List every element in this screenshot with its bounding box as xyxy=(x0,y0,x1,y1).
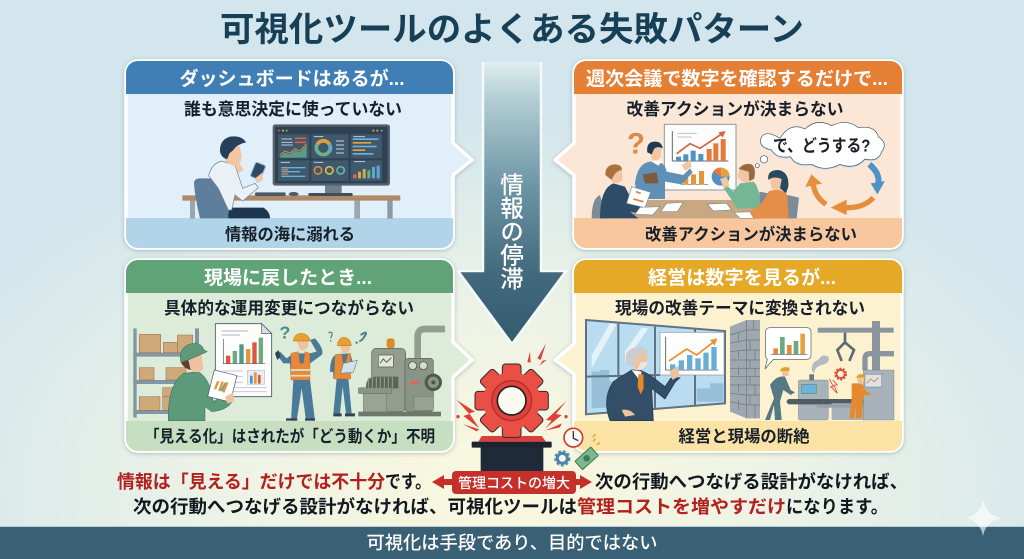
icon: sparkle xyxy=(966,500,1001,536)
line 2 right: になります。 xyxy=(786,496,888,517)
panel footer band xyxy=(574,421,902,451)
line 2 red: 管理コストを増やすだけ xyxy=(577,496,786,517)
subheading: 改善アクションが決まらない xyxy=(626,99,844,119)
footer text: 改善アクションが決まらない xyxy=(645,225,857,244)
cost pill: 管理コストの増大 xyxy=(458,475,570,491)
panel: management xyxy=(555,260,902,451)
panel header xyxy=(574,260,902,293)
question mark: ? xyxy=(279,322,290,342)
question mark: ? xyxy=(627,127,645,160)
arrow: information stagnation xyxy=(458,62,566,344)
header text: 週次会議で数字を確認するだけで... xyxy=(586,68,888,90)
line 2 left: 次の行動へつなげる設計がなければ、可視化ツールは xyxy=(133,496,577,517)
illustration: meeting xyxy=(592,122,885,218)
panel header xyxy=(574,61,902,94)
subheading: 具体的な運用変更につながらない xyxy=(164,298,414,318)
subheading: 誰も意思決定に使っていない xyxy=(184,100,402,119)
subheading: 現場の改善テーマに変換されない xyxy=(615,298,865,318)
footer text: 経営と現場の断絶 xyxy=(678,427,810,446)
icon: broken gear on pedestal xyxy=(456,343,600,477)
header text: 経営は数字を見るが... xyxy=(648,266,836,289)
footer text: 「見える化」はされたが「どう動くか」不明 xyxy=(145,427,435,446)
icon: money xyxy=(575,447,598,470)
line 1 black: です。 xyxy=(385,471,431,492)
panel header xyxy=(126,61,453,94)
illustration: workers, document and machine xyxy=(133,322,445,421)
money sparks xyxy=(593,434,600,445)
bottom banner: 可視化は手段であり、目的ではない xyxy=(366,533,658,553)
bottom message text xyxy=(117,471,908,517)
line 1 red lead: 情報は「見える」だけでは不十分 xyxy=(117,471,386,492)
panel: dashboard xyxy=(126,61,472,248)
panel footer band xyxy=(126,421,453,451)
cloud text: で、どうする? xyxy=(773,136,870,156)
lightning and burst marks xyxy=(456,343,568,431)
header text: ダッシュボードはあるが... xyxy=(180,67,404,90)
illustration: executive, wall and factory xyxy=(586,320,894,421)
icon: blue gear xyxy=(556,452,569,465)
header text: 現場に戻したとき... xyxy=(204,267,372,289)
panel: weekly meeting xyxy=(555,61,902,248)
bottom banner xyxy=(0,526,1024,559)
title: 可視化ツールのよくある失敗パターン xyxy=(220,11,804,49)
footer text: 情報の海に溺れる xyxy=(225,225,355,244)
panel header xyxy=(126,260,453,293)
gear xyxy=(475,364,548,437)
panel: back on site xyxy=(126,260,472,451)
arrow label: 情報の停滞 xyxy=(497,172,524,290)
cost pill xyxy=(452,471,576,494)
panel footer band xyxy=(126,218,453,248)
illustration: person at monitor xyxy=(182,124,400,219)
double arrow xyxy=(432,475,592,489)
line 1 right: 次の行動へつなげる設計がなければ、 xyxy=(595,471,908,492)
icon: clock xyxy=(564,428,583,447)
panel footer band xyxy=(574,218,902,248)
pedestal xyxy=(472,436,552,477)
